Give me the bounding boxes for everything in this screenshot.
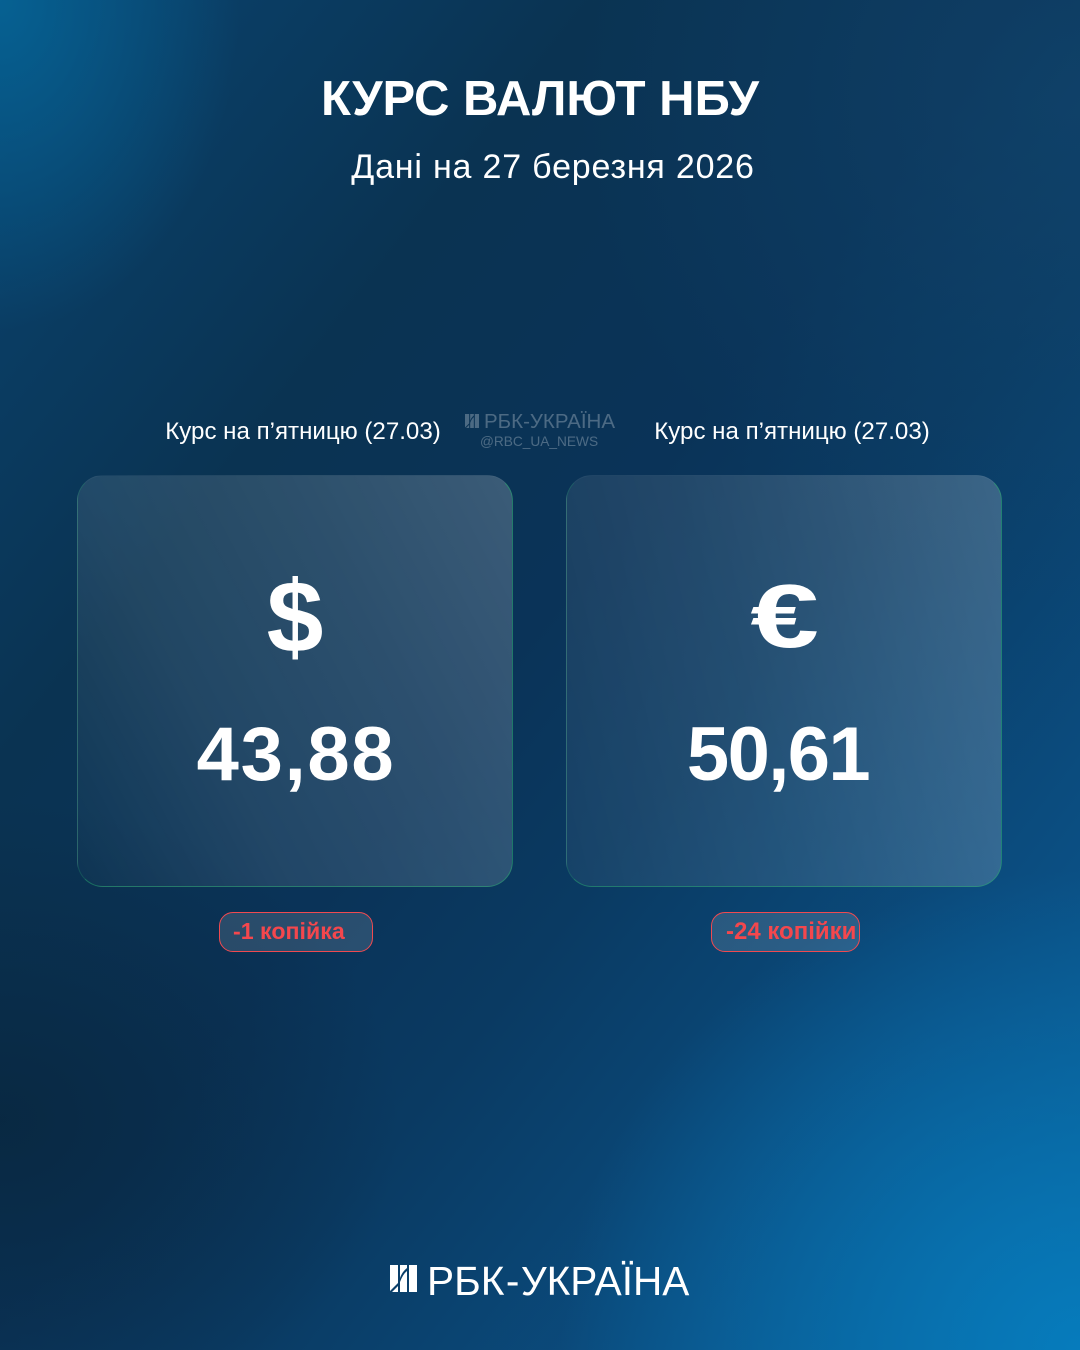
- watermark brand: РБК-УКРАЇНА: [484, 410, 615, 433]
- USD change text: -1 копійка: [233, 918, 345, 944]
- panel: USD card: [77, 475, 513, 887]
- label: USD rate date: Курс на п’ятницю (27.03): [165, 418, 441, 445]
- EUR change text: -24 копійки: [726, 918, 856, 945]
- icon: RBC logo: [390, 1265, 417, 1292]
- title: КУРС ВАЛЮТ НБУ: [321, 72, 759, 126]
- EUR rate value: 50,61: [687, 712, 869, 797]
- icon: euro sign: €: [750, 567, 819, 667]
- panel: EUR card: [566, 475, 1002, 887]
- watermark handle: @RBC_UA_NEWS: [480, 434, 598, 449]
- badge: EUR change: [711, 912, 860, 952]
- USD rate value: 43,88: [197, 712, 395, 797]
- footer logo: [390, 1258, 690, 1304]
- subtitle: date: Дані на 27 березня 2026: [351, 148, 755, 186]
- watermark: [465, 410, 615, 449]
- icon: dollar sign: $: [267, 560, 323, 674]
- label: EUR rate date: Курс на п’ятницю (27.03): [654, 418, 930, 445]
- icon: watermark logo: [465, 414, 479, 428]
- brand name: РБК-УКРАЇНА: [427, 1258, 689, 1304]
- badge: USD change: [219, 912, 373, 952]
